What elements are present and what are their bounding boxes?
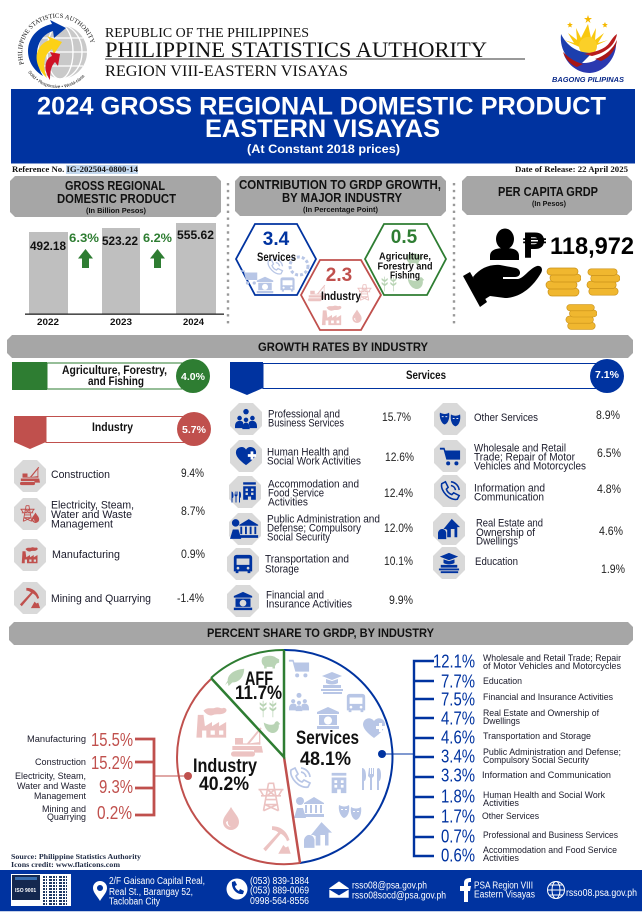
row: transportation: Transportation and <box>265 554 349 566</box>
callout: industry breakdown: Manufacturing <box>27 734 86 745</box>
logo: Philippine Statistics Authority seal <box>18 14 95 88</box>
phone numbers: (053) 889-0069 <box>250 886 309 896</box>
panel heading: contribution to growth: (In Percentage Point) <box>303 205 378 214</box>
growth header: agriculture: Agriculture, Forestry, <box>62 365 167 377</box>
phone numbers: (053) 839-1884 <box>250 876 309 887</box>
callout: services breakdown: 7.7% <box>441 672 475 692</box>
row: manufacturing: 0.9% <box>181 549 205 561</box>
callout: industry breakdown: Construction <box>35 757 86 768</box>
per capita value: 118,972 <box>550 233 634 260</box>
panel heading: contribution to growth <box>235 176 446 216</box>
email addresses: rsso08@psa.gov.ph <box>352 880 427 892</box>
callout: services breakdown: Professional and Business Services <box>483 830 618 841</box>
agency heading: REGION VIII-EASTERN VISAYAS <box>105 63 348 80</box>
row: electricity <box>14 498 205 530</box>
row: financial: 9.9% <box>389 595 413 607</box>
row: mining: Mining and Quarrying <box>51 593 151 605</box>
callout: services breakdown: 12.1% <box>433 652 475 672</box>
row: education: Education <box>475 556 518 568</box>
row: real estate: 4.6% <box>599 526 623 538</box>
hexagon: agriculture contribution <box>365 224 446 295</box>
address: 2/F Gaisano Capital Real, <box>109 876 205 887</box>
pie chart: share by industry: 11.7% <box>235 683 282 704</box>
pie chart: share by industry: AFF <box>245 669 273 690</box>
growth header: agriculture: 4.0% <box>181 371 206 383</box>
bar chart: GRDP by year: 2024 <box>183 317 205 328</box>
section heading: growth rates <box>7 335 633 358</box>
address: Real St., Barangay 52, <box>109 887 193 898</box>
panel heading: GRDP: (In Billion Pesos) <box>86 206 146 215</box>
agency heading: PHILIPPINE STATISTICS AUTHORITY <box>105 37 487 62</box>
row: accommodation: Food Service <box>268 488 324 500</box>
facebook page <box>474 880 535 900</box>
row: information: 4.8% <box>597 484 621 496</box>
callout: services breakdown: Wholesale and Retail Trade; Repair <box>483 653 621 664</box>
bar chart: GRDP by year: 492.18 <box>30 239 66 253</box>
callout: services breakdown: 3.3% <box>441 766 475 786</box>
bar chart: GRDP by year: 2022 <box>37 317 59 328</box>
row: other services: 8.9% <box>596 410 620 422</box>
panel heading: GRDP <box>10 176 221 217</box>
ISO badge and QR code: ISO 9001 <box>15 888 36 894</box>
pie icons: services <box>289 660 385 848</box>
row: wholesale: Wholesale and Retail <box>474 442 566 454</box>
row: real estate: Real Estate and <box>476 518 543 530</box>
row: construction: Construction <box>51 469 110 481</box>
row: wholesale: Vehicles and Motorcycles <box>474 460 586 472</box>
row: other services: Other Services <box>474 412 538 424</box>
growth header: industry: Industry <box>92 422 134 434</box>
callout: industry breakdown: Water and Waste <box>17 781 86 792</box>
callout: industry breakdown: 0.2% <box>97 803 132 823</box>
row: professional <box>230 403 411 435</box>
row: public administration: Social Security <box>267 532 330 544</box>
growth header: agriculture: and Fishing <box>88 376 144 388</box>
divider dots <box>228 183 454 326</box>
growth header: industry: 5.7% <box>182 424 207 436</box>
callout: services breakdown: Public Administration and Defense; <box>483 747 621 758</box>
source note <box>11 852 141 869</box>
row: mining <box>14 582 204 614</box>
row: public administration: 12.0% <box>384 523 413 535</box>
agency heading: REPUBLIC OF THE PHILIPPINES <box>105 26 309 41</box>
title banner: EASTERN VISAYAS <box>205 115 440 143</box>
pie icons: industry <box>196 707 291 854</box>
facebook page: PSA Region VIII <box>474 880 533 892</box>
row: health: 12.6% <box>385 452 414 464</box>
row: financial: Financial and <box>266 590 324 602</box>
row: manufacturing: Manufacturing <box>52 549 120 561</box>
title banner <box>11 89 635 164</box>
row: professional: Business Services <box>268 418 344 430</box>
icon: facebook <box>460 878 471 902</box>
panel heading: per capita GRDP: (In Pesos) <box>532 199 566 208</box>
row: electricity: Electricity, Steam, <box>51 500 134 512</box>
callout: industry breakdown <box>15 730 192 823</box>
callout: services breakdown: Dwellings <box>483 716 520 727</box>
callout: services breakdown: Information and Communication <box>482 770 611 781</box>
callout: industry breakdown: Management <box>34 791 86 802</box>
logo: Bagong Pilipinas: BAGONG PILIPINAS <box>552 75 624 84</box>
row: real estate: Dwellings <box>476 536 518 548</box>
row: health: Social Work Activities <box>267 456 361 468</box>
callout: services breakdown: Financial and Insurance Activities <box>483 692 613 703</box>
row: public administration: Defense; Compulsory <box>267 522 361 534</box>
row: education: 1.9% <box>601 564 625 576</box>
growth header: services <box>230 359 624 395</box>
row: financial: Insurance Activities <box>266 598 352 610</box>
row: public administration <box>229 513 413 545</box>
bar chart: GRDP by year: 523.22 <box>102 234 138 248</box>
row: wholesale <box>434 440 621 472</box>
footer band <box>0 870 642 912</box>
callout: services breakdown: of Motor Vehicles and Motorcycles <box>483 661 621 672</box>
bar chart: GRDP by year: 6.3% <box>69 231 99 245</box>
industry growth list <box>14 460 205 614</box>
icon: location pin <box>93 881 107 901</box>
title banner: (At Constant 2018 prices) <box>247 144 400 156</box>
row: real estate <box>433 513 623 548</box>
callout: industry breakdown: Electricity, Steam, <box>15 771 86 782</box>
pie chart: share by industry: 40.2% <box>199 774 249 795</box>
callout: services breakdown: Education <box>483 676 522 687</box>
ISO badge and QR code <box>11 874 71 906</box>
growth header: services: Services <box>406 370 446 382</box>
icon: globe <box>548 882 564 898</box>
section heading: percent share: PERCENT SHARE TO GRDP, BY INDUSTRY <box>207 626 434 640</box>
bar chart: GRDP by year: 2023 <box>110 317 132 328</box>
icon: stacks of coins <box>546 268 620 329</box>
bar chart: GRDP by year: 6.2% <box>143 231 172 245</box>
row: education <box>433 547 625 579</box>
pie chart: share by industry: Services <box>296 728 359 749</box>
row: construction: 9.4% <box>181 468 204 480</box>
row: accommodation <box>229 476 413 508</box>
row: wholesale: 6.5% <box>597 448 621 460</box>
callout: industry breakdown: 15.2% <box>91 753 133 773</box>
row: manufacturing <box>14 539 205 571</box>
row: accommodation: Accommodation and <box>268 478 359 490</box>
row: transportation: 10.1% <box>384 556 413 568</box>
row: electricity: 8.7% <box>181 506 205 518</box>
growth header: industry <box>14 412 211 449</box>
hexagon: agriculture contribution: Fishing <box>390 270 420 282</box>
hexagon: services contribution <box>236 224 316 295</box>
row: electricity: Management <box>51 518 113 530</box>
address <box>109 876 205 908</box>
logo: Bagong Pilipinas <box>552 15 624 84</box>
section heading: growth rates: GROWTH RATES BY INDUSTRY <box>258 340 428 354</box>
address: Tacloban City <box>109 896 160 908</box>
callout: services breakdown: Real Estate and Ownership of <box>483 708 599 719</box>
growth header: agriculture <box>12 359 210 393</box>
callout: industry breakdown: Mining and <box>42 804 86 815</box>
logo: Philippine Statistics Authority seal: PHILIPPINE STATISTICS AUTHORITY <box>18 14 95 66</box>
hexagon: agriculture contribution: Forestry and <box>378 260 432 272</box>
row: accommodation: Activities <box>268 496 308 508</box>
callout: services breakdown: Human Health and Social Work <box>483 790 605 801</box>
row: professional: 15.7% <box>382 412 411 424</box>
callout: services breakdown: 1.8% <box>441 786 475 806</box>
panel heading: contribution to growth: CONTRIBUTION TO GRDP GROWTH, <box>239 177 441 192</box>
callout: industry breakdown: Quarrying <box>47 812 86 823</box>
row: transportation <box>227 548 413 580</box>
callout: services breakdown <box>378 652 621 866</box>
panel heading: GRDP: GROSS REGIONAL <box>65 178 165 193</box>
pie chart: share by industry: 48.1% <box>300 749 351 770</box>
section heading: percent share <box>9 622 633 645</box>
panel heading: GRDP: DOMESTIC PRODUCT <box>57 191 176 206</box>
callout: services breakdown: 0.7% <box>441 826 475 846</box>
callout: services breakdown: Activities <box>483 853 519 864</box>
row: accommodation: 12.4% <box>384 488 413 500</box>
panel heading: contribution to growth: BY MAJOR INDUSTRY <box>282 190 402 205</box>
callout: services breakdown: 0.6% <box>441 846 475 866</box>
hexagon: industry contribution <box>301 260 381 330</box>
callout: services breakdown: 4.7% <box>441 708 475 728</box>
callout: services breakdown: Transportation and Storage <box>483 731 591 742</box>
callout: industry breakdown: 15.5% <box>91 730 133 750</box>
hexagon: agriculture contribution: 0.5 <box>391 227 418 248</box>
pie icons: agriculture <box>225 656 280 733</box>
bar chart: GRDP by year: 555.62 <box>177 228 214 242</box>
release date: Date of Release: 22 April 2025 <box>515 165 628 174</box>
row: health <box>230 440 414 472</box>
row: transportation: Storage <box>265 564 299 576</box>
email addresses <box>352 880 446 902</box>
callout: industry breakdown: 9.3% <box>99 777 133 797</box>
row: professional: Professional and <box>268 408 340 420</box>
title banner: 2024 GROSS REGIONAL DOMESTIC PRODUCT <box>37 92 606 120</box>
source note: Icons credit: www.flaticons.com <box>11 860 121 869</box>
services growth list <box>227 403 625 617</box>
hexagon: services contribution: Services <box>257 252 296 264</box>
icon: open envelope <box>329 881 349 898</box>
row: public administration: Public Administration and <box>267 514 380 526</box>
row: information: Information and <box>474 482 545 494</box>
row: construction <box>14 460 204 492</box>
source note: Source: Philippine Statistics Authority <box>11 852 141 861</box>
hexagon: industry contribution: 2.3 <box>326 265 352 286</box>
callout: services breakdown: 7.5% <box>441 690 475 710</box>
callout: services breakdown: Accommodation and Food Service <box>483 845 617 856</box>
row: health: Human Health and <box>267 446 349 458</box>
email addresses: rsso08socd@psa.gov.ph <box>352 890 446 902</box>
callout: services breakdown: 1.7% <box>441 806 475 826</box>
phone numbers: 0998-564-8556 <box>250 896 309 907</box>
callout: services breakdown: 4.6% <box>441 728 475 748</box>
icon: person with hand holding peso: ₱ <box>522 227 547 267</box>
logo: Philippine Statistics Authority seal: Solid • Responsive • World-class <box>28 70 84 88</box>
row: other services <box>434 403 620 435</box>
reference number: Reference No. IG-202504-0800-14 <box>12 165 138 174</box>
row: information <box>434 475 621 507</box>
row: mining: -1.4% <box>177 593 204 605</box>
hexagon: industry contribution: Industry <box>321 291 362 303</box>
row: wholesale: Trade; Repair of Motor <box>474 452 575 464</box>
callout: services breakdown: Other Services <box>482 811 539 822</box>
row: electricity: Water and Waste <box>51 509 132 521</box>
row: real estate: Ownership of <box>476 527 536 539</box>
hexagon: services contribution: 3.4 <box>263 229 290 250</box>
growth header: services: 7.1% <box>595 369 620 381</box>
facebook page: Eastern Visayas <box>474 890 535 900</box>
pie chart: share by industry: Industry <box>193 756 257 777</box>
agency heading <box>105 26 525 80</box>
callout: services breakdown: Compulsory Social Security <box>483 755 589 766</box>
icon: person with hand holding peso <box>463 227 547 307</box>
panel heading: per capita GRDP: PER CAPITA GRDP <box>498 184 598 199</box>
callout: services breakdown: 3.4% <box>441 746 475 766</box>
row: information: Communication <box>474 492 544 504</box>
bar chart: GRDP by year <box>25 223 224 328</box>
pie chart: share by industry <box>177 650 392 864</box>
hexagon: agriculture contribution: Agriculture, <box>379 250 431 262</box>
phone numbers <box>250 876 309 907</box>
panel heading: per capita GRDP <box>462 176 632 215</box>
row: financial <box>227 585 413 617</box>
callout: services breakdown: Activities <box>483 798 519 809</box>
icon: telephone <box>226 878 248 900</box>
